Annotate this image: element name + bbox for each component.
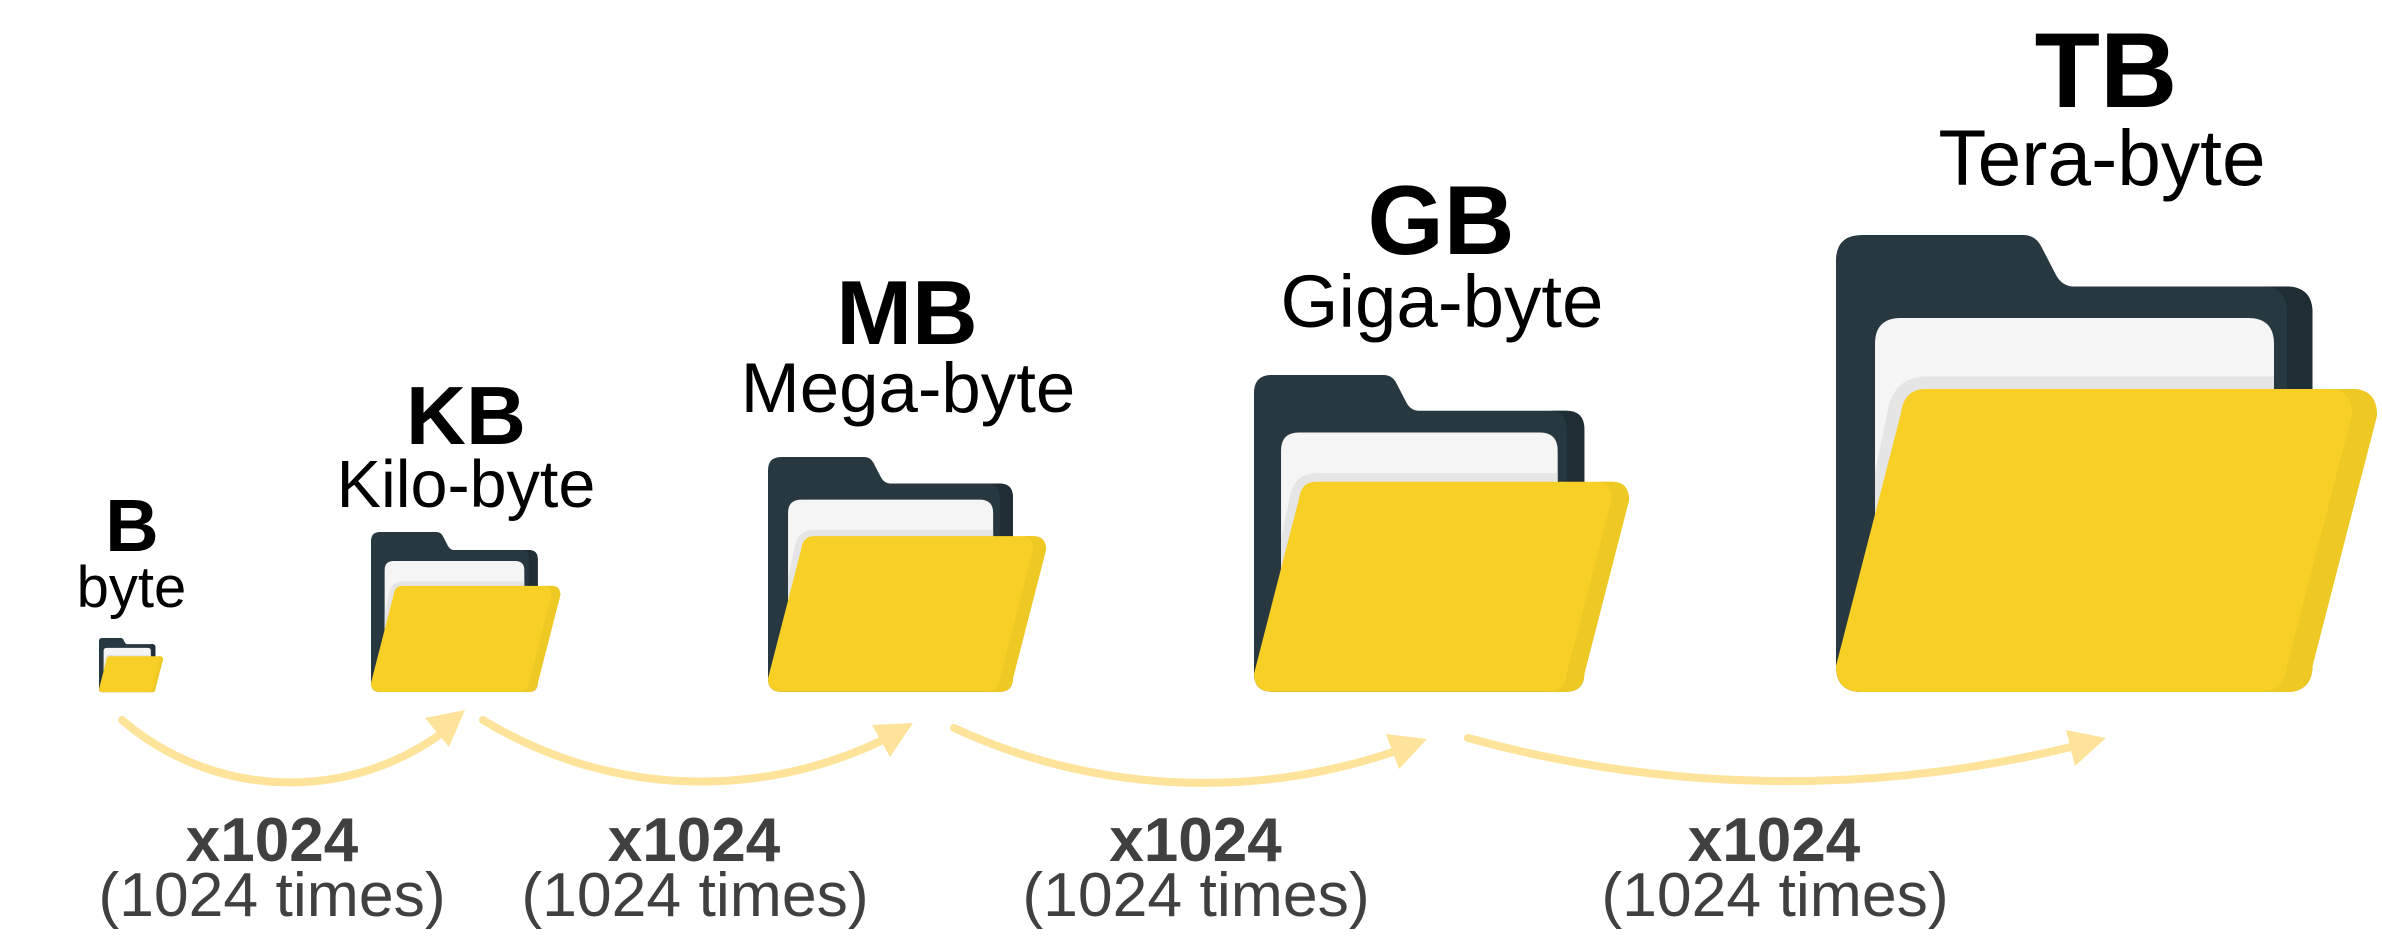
icon: byte folder bbox=[99, 638, 163, 692]
heading: MB: MB bbox=[836, 263, 978, 364]
label: Kilo-byte: Kilo-byte bbox=[337, 448, 595, 522]
multiplier: GB to TB bbox=[1601, 806, 1949, 930]
arrow: GB to TB bbox=[1468, 730, 2106, 781]
arrow: MB to GB bbox=[954, 728, 1427, 783]
multiplier: B to KB bbox=[98, 806, 446, 930]
multiplier: B to KB: x1024 bbox=[186, 806, 359, 875]
label: Giga-byte: Giga-byte bbox=[1280, 260, 1604, 343]
label: Tera-byte: Tera-byte bbox=[1938, 114, 2266, 202]
unit: kilobyte bbox=[337, 369, 595, 692]
label: Mega-byte: Mega-byte bbox=[741, 349, 1075, 428]
heading: B: B bbox=[105, 484, 159, 567]
unit: byte bbox=[77, 484, 186, 692]
icon: megabyte folder bbox=[768, 457, 1046, 692]
multiplier: GB to TB: x1024 bbox=[1688, 806, 1861, 875]
multiplier: MB to GB bbox=[1022, 806, 1370, 930]
multiplier: KB to MB: x1024 bbox=[608, 806, 781, 875]
multiplier: GB to TB: (1024 times) bbox=[1601, 860, 1949, 930]
heading: GB: GB bbox=[1368, 165, 1514, 275]
multiplier: KB to MB: (1024 times) bbox=[521, 860, 869, 930]
multiplier: MB to GB: (1024 times) bbox=[1022, 860, 1370, 930]
unit: terabyte bbox=[1836, 10, 2377, 692]
multiplier: KB to MB bbox=[521, 806, 869, 930]
unit: gigabyte bbox=[1254, 165, 1629, 692]
icon: terabyte folder bbox=[1836, 235, 2377, 692]
heading: KB: KB bbox=[406, 369, 526, 462]
unit: megabyte bbox=[741, 263, 1075, 692]
heading: TB: TB bbox=[2035, 10, 2177, 130]
multiplier: MB to GB: x1024 bbox=[1109, 806, 1282, 875]
icon: kilobyte folder bbox=[371, 532, 560, 692]
arrow: B to KB bbox=[122, 710, 465, 782]
arrow: KB to MB bbox=[483, 720, 913, 782]
multiplier: B to KB: (1024 times) bbox=[98, 860, 446, 930]
label: byte: byte bbox=[77, 555, 186, 620]
icon: gigabyte folder bbox=[1254, 375, 1629, 692]
